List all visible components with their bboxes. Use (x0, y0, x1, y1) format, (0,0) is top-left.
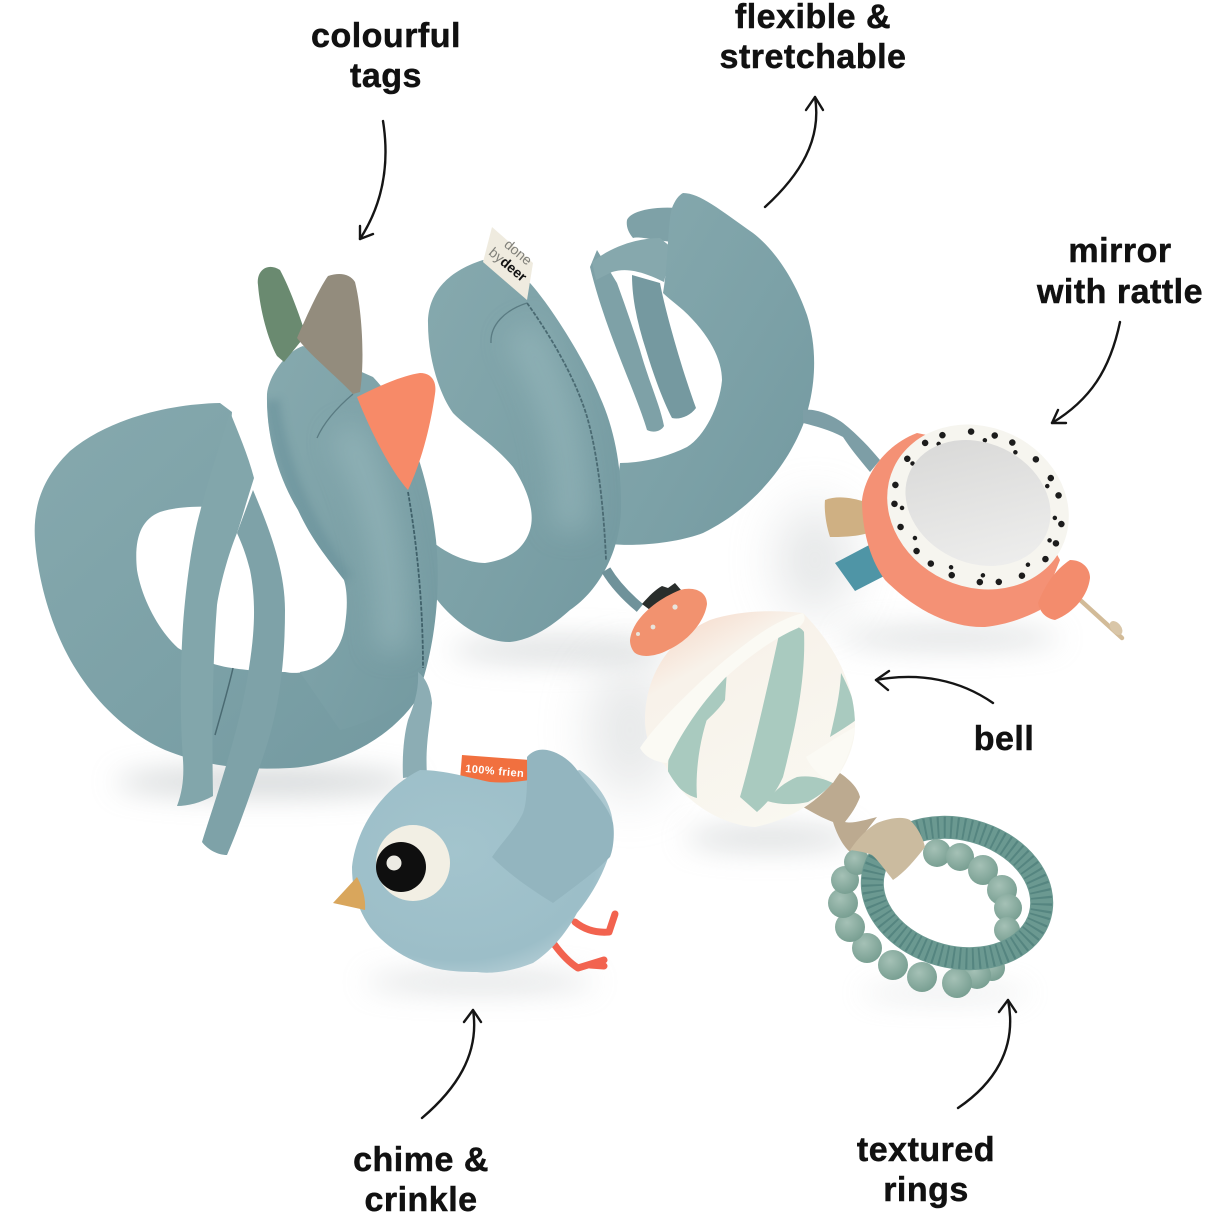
middle tube highlight (520, 330, 571, 530)
wing (492, 750, 614, 903)
label: mirror with rattle: mirror (1068, 232, 1172, 270)
arrow: flexible and stretchable (765, 97, 823, 207)
brand tag (483, 227, 536, 300)
label: textured rings: textured (857, 1131, 995, 1169)
mirror with rattle toy (803, 395, 1125, 638)
label: mirror with rattle: with rattle (1036, 273, 1203, 311)
ring dots outer (869, 404, 1087, 610)
ball (645, 611, 855, 827)
brand tag: done (501, 236, 536, 268)
string knot (1107, 619, 1125, 637)
middle tube (425, 260, 621, 642)
cord (403, 672, 432, 778)
brand tag: bydeer (486, 244, 531, 285)
front tube (267, 346, 438, 730)
contact shadows (115, 505, 1060, 999)
orange label: 100% frien (465, 763, 525, 780)
lower lip (806, 727, 855, 783)
strawberry leaf (642, 583, 681, 610)
label: bell: bell (974, 720, 1034, 758)
label: flexible and stretchable (720, 0, 906, 76)
upper panel seam (317, 394, 353, 438)
label: textured rings: rings (883, 1171, 969, 1209)
arrow: bell (876, 671, 993, 703)
cap lip (640, 613, 805, 763)
orange label (460, 755, 530, 790)
label: colourful tags (311, 17, 461, 95)
ring ridges (857, 809, 1057, 977)
leather loop (850, 818, 925, 880)
left ribbons (202, 490, 285, 855)
mirror (885, 417, 1071, 589)
bird toy (333, 672, 615, 973)
label: colourful tags: tags (350, 57, 422, 95)
spiral body (35, 193, 814, 855)
string (1078, 598, 1122, 638)
front tube shading (272, 400, 392, 650)
mirror ring (860, 395, 1096, 619)
blue fabric tag (835, 543, 892, 591)
ring dots inner (879, 414, 1077, 600)
arrow: colourful tags (360, 121, 385, 239)
label: textured rings (857, 1131, 995, 1209)
lower knot (803, 773, 877, 852)
green tag (258, 267, 306, 362)
strawberry (630, 589, 707, 656)
beak (333, 877, 365, 910)
arrow: mirror with rattle (1052, 322, 1120, 423)
label: flexible and stretchable: stretchable (720, 38, 906, 76)
legs (554, 914, 615, 968)
back ribbons (590, 208, 696, 432)
strawberry seeds (636, 604, 678, 636)
side knob (1038, 560, 1090, 620)
left tube (35, 403, 423, 769)
left tube hidden seam (215, 668, 233, 735)
grey tag (297, 274, 362, 394)
bell ball toy (606, 570, 877, 852)
coral tag (357, 373, 435, 490)
bead ring (828, 839, 1022, 998)
middle tube seam (527, 303, 606, 560)
back tube (610, 193, 814, 545)
cord (606, 570, 640, 608)
coral body (862, 433, 1060, 627)
textured rings (828, 809, 1057, 998)
arrow: textured rings (958, 1000, 1016, 1108)
ridged ring (857, 809, 1057, 977)
front tube seam (408, 492, 423, 668)
panel seam (491, 303, 527, 343)
tan fabric tag (825, 497, 868, 537)
label: chime and crinkle: chime & (353, 1141, 489, 1179)
ball stripes (668, 626, 856, 812)
body (352, 770, 613, 973)
cord (803, 410, 880, 472)
arrow: chime and crinkle (422, 1010, 481, 1118)
label: chime and crinkle (353, 1141, 489, 1214)
label: mirror with rattle (1036, 232, 1203, 311)
label: colourful tags: colourful (311, 17, 461, 55)
colourful tags (258, 267, 435, 490)
eye (376, 825, 450, 901)
